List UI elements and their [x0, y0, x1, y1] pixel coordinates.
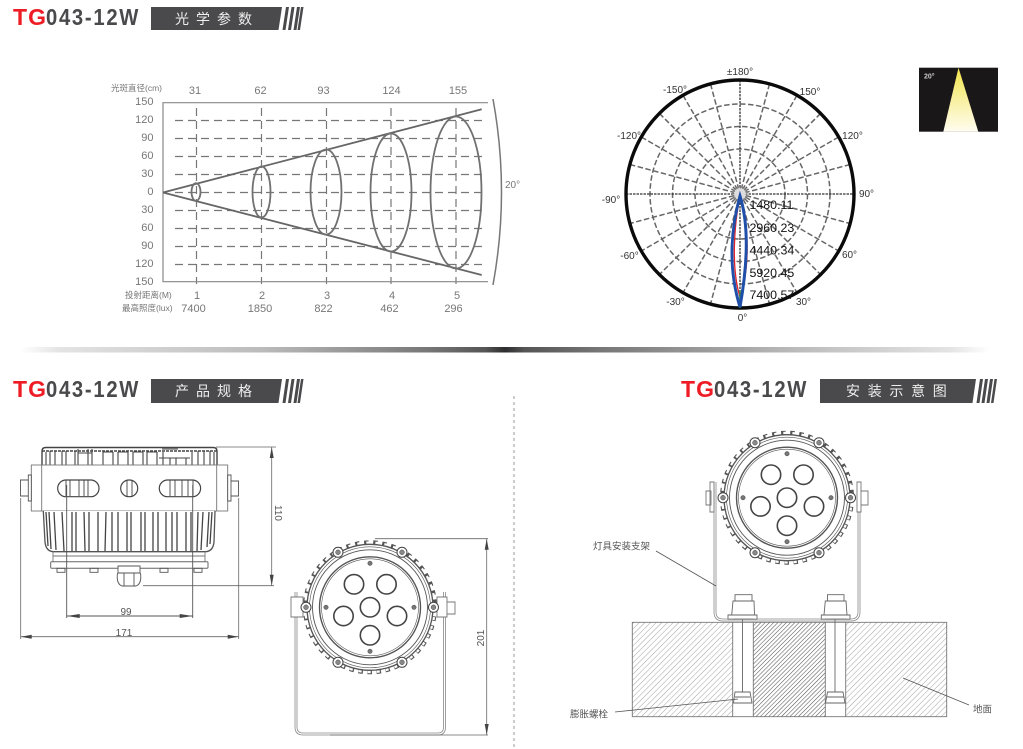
dimension 171: 171 — [116, 628, 133, 639]
dimension 99 — [67, 485, 193, 618]
polar light distribution chart — [602, 67, 874, 324]
installation: ground block — [632, 622, 947, 717]
header: product specifications: 043-12W — [46, 376, 139, 402]
header: installation diagram — [681, 376, 997, 403]
polar light distribution chart: 150° — [800, 87, 820, 98]
beam cone chart — [111, 83, 520, 315]
polar light distribution chart: -60° — [620, 251, 639, 262]
header: optical parameters: 光学参数 — [175, 11, 259, 27]
polar light distribution chart: 30° — [796, 297, 811, 308]
header: product specifications: 产品规格 — [175, 383, 259, 399]
beam cone chart: 90 — [141, 240, 154, 252]
beam cone chart: 62 — [254, 85, 267, 97]
polar light distribution chart: 5920.45 — [750, 266, 794, 280]
dimension 201: 201 — [476, 629, 487, 646]
beam cone chart: 120 — [135, 114, 154, 126]
beam cone chart: 822 — [314, 303, 333, 315]
polar light distribution chart: 60° — [842, 250, 857, 261]
front view lamp with bracket — [291, 542, 455, 735]
beam cone chart: 光斑直径(cm) — [111, 83, 162, 93]
beam cone chart: 1 — [194, 290, 200, 302]
beam cone chart: 31 — [189, 85, 201, 97]
dimension 99: 99 — [120, 607, 132, 618]
beam cone chart: 1850 — [248, 303, 272, 315]
beam cone chart: 最高照度(lux) — [122, 303, 173, 313]
header: optical parameters: 043-12W — [46, 4, 139, 30]
beam cone chart: 4 — [389, 290, 395, 302]
dimension 201 — [330, 539, 489, 735]
beam cone chart: 30 — [141, 204, 154, 216]
beam cone chart: 2 — [259, 290, 265, 302]
side view drawing — [20, 448, 238, 586]
header: installation diagram: 043-12W — [714, 376, 807, 402]
polar light distribution chart: -30° — [666, 297, 685, 308]
polar light distribution chart: -150° — [663, 85, 687, 96]
installation: lamp with bracket — [706, 433, 868, 621]
beam cone chart: 462 — [380, 303, 399, 315]
polar light distribution chart: -120° — [617, 131, 641, 142]
polar light distribution chart: 7400.57 — [750, 288, 794, 302]
beam cone chart: 3 — [324, 290, 330, 302]
beam cone chart: 120 — [135, 258, 154, 270]
header: optical parameters — [13, 4, 304, 30]
dimension 110 — [143, 447, 283, 586]
beam cone chart: 60 — [141, 222, 154, 234]
polar light distribution chart: 4440.34 — [750, 244, 794, 258]
header: installation diagram: TG — [681, 376, 714, 402]
beam cone chart: 150 — [135, 96, 154, 108]
polar light distribution chart: ±180° — [727, 67, 753, 78]
polar light distribution chart: 0° — [738, 313, 747, 324]
beam cone chart: 20° — [505, 180, 520, 191]
header: product specifications — [13, 376, 304, 403]
label: lamp bracket — [593, 540, 716, 586]
beam cone chart: 5 — [454, 290, 460, 302]
header: optical parameters: TG — [13, 4, 46, 30]
installation: expansion bolts — [728, 595, 850, 703]
beam cone chart: 60 — [141, 150, 154, 162]
beam angle thumbnail — [919, 68, 998, 132]
beam cone chart: 30 — [141, 168, 154, 180]
dimension 171 — [21, 498, 239, 639]
label: expansion bolt: 膨胀螺栓 — [570, 708, 609, 720]
vertical dashed divider — [513, 396, 515, 749]
polar light distribution chart: 120° — [842, 131, 863, 142]
beam cone chart: 93 — [317, 85, 330, 97]
beam cone chart: 150 — [135, 276, 154, 288]
beam angle thumbnail: 20° — [924, 72, 935, 80]
beam cone chart: 155 — [449, 85, 467, 97]
polar light distribution chart: 1480.11 — [750, 198, 793, 212]
header: product specifications: TG — [13, 376, 46, 402]
beam cone chart: 124 — [382, 85, 401, 97]
label: ground — [903, 678, 992, 716]
header: installation diagram: 安装示意图 — [846, 383, 954, 399]
label: ground: 地面 — [973, 704, 992, 716]
label: lamp bracket: 灯具安装支架 — [593, 540, 651, 552]
beam cone chart: 7400 — [181, 303, 206, 315]
beam cone chart: 投射距离(M) — [125, 290, 172, 300]
beam cone chart: 296 — [444, 303, 463, 315]
label: expansion bolt — [570, 699, 738, 720]
beam cone chart: 90 — [141, 132, 154, 144]
dimension 110: 110 — [272, 505, 283, 521]
polar light distribution chart: 2960.23 — [750, 221, 794, 235]
polar light distribution chart: -90° — [602, 195, 620, 206]
beam cone chart: 0 — [147, 186, 154, 198]
polar light distribution chart: 90° — [859, 189, 874, 200]
gradient divider — [20, 347, 990, 352]
